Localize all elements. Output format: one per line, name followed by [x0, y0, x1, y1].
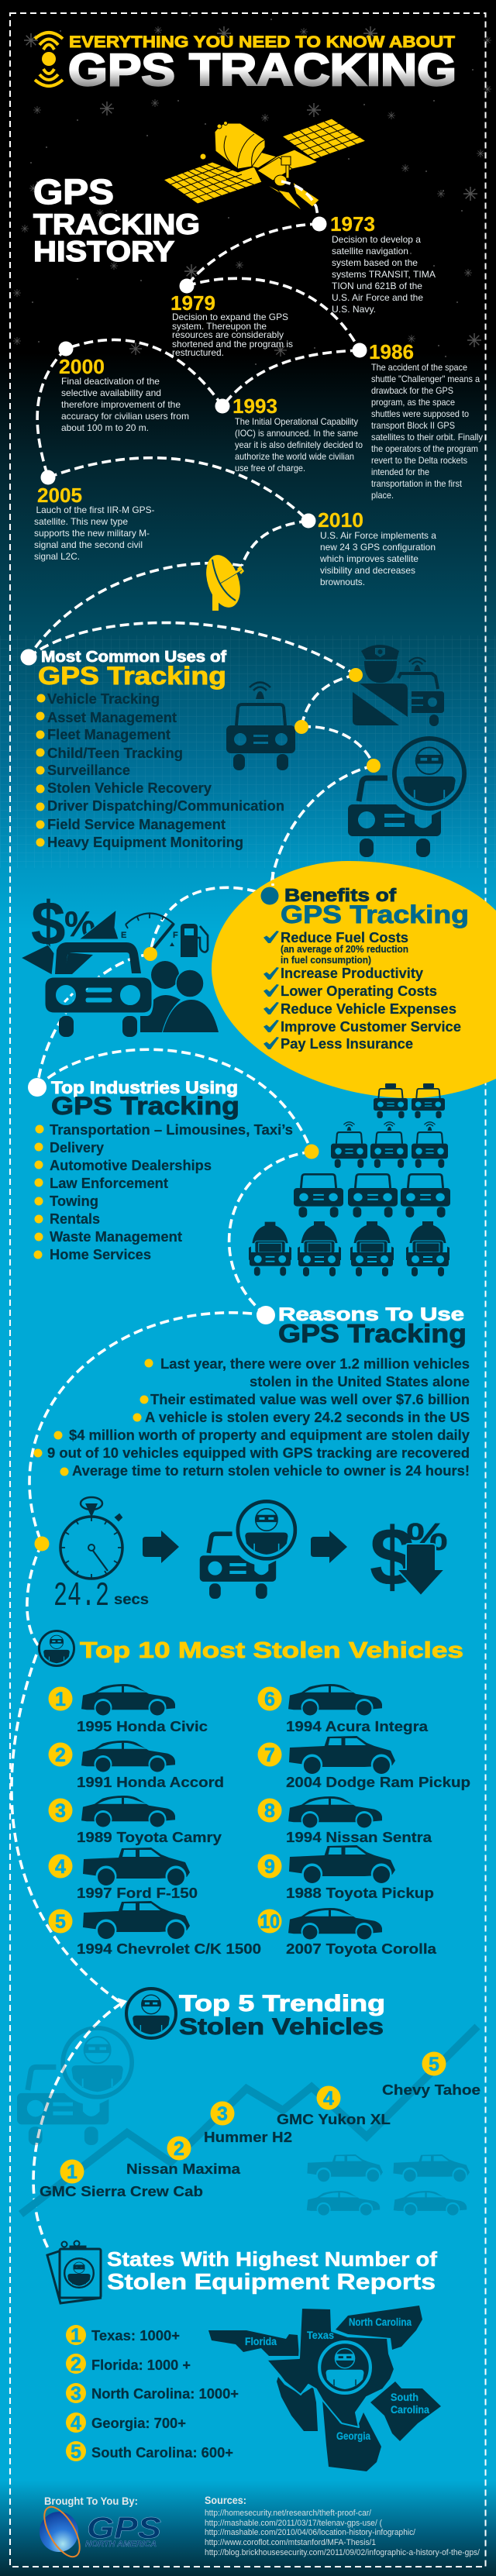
timeline: 1993: use free of charge.: [235, 463, 305, 474]
arrow: [143, 1531, 179, 1563]
trending 1: [40, 2159, 203, 2199]
panel: top industries: GPS Tracking: [51, 1092, 239, 1120]
stopwatch time: 24.2: [53, 1577, 109, 1616]
state 4: [66, 2412, 186, 2434]
timeline: 2005: 2005: [37, 484, 82, 507]
faded vehicles: [307, 2154, 470, 2216]
panel: top 5 trending stolen vehicles: [17, 1989, 480, 2216]
vehicle 8: 8: [264, 1800, 275, 1822]
state 3: North Carolina: 1000+: [91, 2386, 239, 2402]
trending 5: Chevy Tahoe: [382, 2082, 480, 2098]
timeline: 1993: year it is also definitely decided to: [235, 439, 363, 450]
vehicle 2: 1991 Honda Accord: [77, 1775, 224, 1790]
timeline: 1986: The accident of the space: [371, 362, 467, 373]
timeline: 2005: satellite. This new type: [34, 516, 128, 527]
trending 5: [382, 2052, 480, 2098]
industries list: Rentals: [50, 1211, 100, 1227]
heading: Top 10 Most Stolen Vehicles: [80, 1638, 463, 1663]
footer: sources: http://mashable.com/2011/03/17/telenav-gps-use/ (: [205, 2519, 382, 2528]
timeline: 1986: shuttle "Challenger" means a: [371, 374, 480, 384]
vehicle 5: [48, 1901, 261, 1957]
timeline: 1986: 1986: [369, 340, 414, 363]
fuel gauge: E: [121, 931, 126, 940]
benefits list: Improve Customer Service: [281, 1019, 461, 1035]
heading: gps tracking history: [33, 172, 200, 267]
state 2: [66, 2354, 191, 2375]
reasons list: $4 million worth of property and equipment are stolen daily: [69, 1427, 470, 1443]
footer: sources: [205, 2494, 480, 2557]
state 1: Texas: 1000+: [91, 2328, 180, 2344]
timeline: 1979: resources are considerably: [172, 329, 284, 340]
trending 4: 4: [323, 2088, 334, 2109]
timeline: 2010: which improves satellite: [319, 553, 418, 564]
timeline: 2000: [59, 341, 189, 433]
vehicle 3: 1989 Toyota Camry: [77, 1830, 222, 1845]
map labels: Florida: [245, 2335, 277, 2347]
map labels: North Carolina: [349, 2316, 412, 2328]
panel: benefits: [212, 861, 496, 1098]
map labels: Carolina: [391, 2403, 429, 2416]
timeline: 2000: about 100 m to 20 m.: [61, 422, 149, 433]
heading: States With Highest Number of: [107, 2247, 437, 2271]
vehicle 10: 10: [260, 1911, 280, 1933]
timeline: 1973: system based on the: [332, 257, 418, 268]
trending 2: Nissan Maxima: [126, 2161, 241, 2177]
windshield dash in headlight: [64, 994, 73, 1002]
vehicle 4: 4: [55, 1856, 66, 1878]
timeline: 1993: 1993: [232, 394, 277, 418]
timeline: 1986: drawback for the GPS: [371, 385, 453, 396]
faded trend line: [21, 2027, 477, 2214]
timeline: 1973: TION und 621B of the: [332, 281, 422, 291]
timeline: 1993: (IOC) is announced. In the same: [235, 428, 358, 439]
marker dot: [257, 1306, 275, 1324]
timeline: 2000: Final deactivation of the: [61, 376, 160, 387]
title line one: EVERYTHING YOU NEED TO KNOW ABOUT: [69, 33, 455, 51]
timeline: 1986: revert to the Delta rockets: [371, 455, 467, 466]
timeline: 1986: [352, 340, 483, 501]
timeline: 1993: [215, 394, 363, 474]
map labels: [245, 2316, 429, 2442]
yellow blob: [212, 861, 496, 1098]
fuel gauge: [121, 913, 178, 949]
benefits list: [264, 930, 461, 1052]
icon: thief and car: [348, 739, 464, 857]
uses list: Child/Teen Tracking: [47, 746, 183, 761]
trending 5: 5: [429, 2054, 439, 2075]
reasons list: A vehicle is stolen every 24.2 seconds in the US: [145, 1410, 470, 1425]
timeline: 1973: Decision to develop a: [332, 234, 421, 245]
vehicle 1: 1: [55, 1689, 66, 1710]
vehicle 6: 1994 Acura Integra: [286, 1719, 429, 1734]
vehicle 3: 3: [55, 1800, 66, 1822]
timeline: 2010: 2010: [318, 508, 363, 532]
state 3: [66, 2383, 239, 2405]
marker dot: [28, 1078, 46, 1097]
heading: gps tracking history: TRACKING: [33, 208, 200, 240]
footer: sources: Sources:: [205, 2494, 246, 2506]
uses list: Driver Dispatching/Communication: [47, 798, 284, 814]
map labels: Georgia: [336, 2430, 370, 2442]
vehicle 6: [257, 1684, 429, 1734]
icon: falling value: $: [370, 1511, 415, 1603]
industries list: Waste Management: [50, 1229, 182, 1245]
vehicle 9: 9: [264, 1856, 275, 1878]
timeline: 2005: signal L2C.: [34, 551, 80, 562]
industries list: Automotive Dealerships: [50, 1158, 212, 1173]
timeline: 1973: U.S. Navy.: [332, 304, 376, 315]
state 2: Florida: 1000 +: [91, 2357, 191, 2373]
trending 2: [126, 2136, 241, 2177]
trending 1: GMC Sierra Crew Cab: [40, 2184, 203, 2199]
panel: most common uses: [20, 649, 284, 850]
map: thief: [319, 2342, 370, 2393]
timeline: 1979: Decision to expand the GPS: [172, 312, 288, 322]
vehicle 9: 1988 Toyota Pickup: [286, 1886, 434, 1901]
vehicle 7: [257, 1736, 470, 1790]
icon: fleet of vehicles: [249, 1083, 450, 1276]
benefits list: Pay Less Insurance: [281, 1036, 413, 1052]
timeline: 2010: new 24 3 GPS configuration: [320, 542, 436, 553]
dash over blob: [271, 872, 274, 886]
timeline: 1986: intended for the: [371, 467, 429, 477]
timeline: 1979: 1979: [170, 291, 215, 315]
fuel pump: [181, 924, 198, 957]
uses list: Heavy Equipment Monitoring: [47, 835, 243, 850]
timeline: 1973: satellite navigation: [332, 246, 408, 257]
faded thief car: [17, 2028, 132, 2145]
uses list: [36, 691, 284, 850]
vehicle 7: 2004 Dodge Ram Pickup: [286, 1775, 470, 1790]
vehicle 4: [48, 1848, 198, 1901]
reasons list: Their estimated value was well over $7.6 billion: [150, 1392, 470, 1407]
icon: police officer and car: [353, 645, 444, 726]
timeline: 2000: therefore improvement of the: [61, 399, 181, 410]
panel: reasons to use: GPS Tracking: [278, 1319, 467, 1348]
trending 2: 2: [174, 2138, 184, 2160]
timeline: 1979: restructured.: [172, 347, 224, 358]
heading: gps tracking history: HISTORY: [33, 236, 174, 267]
vehicle 8: 1994 Nissan Sentra: [286, 1830, 432, 1845]
state 2: 2: [71, 2354, 81, 2375]
dashed timeline path: [12, 224, 374, 2250]
vehicle 4: 1997 Ford F-150: [77, 1886, 198, 1901]
heading: Reasons To Use: [278, 1304, 464, 1325]
panel: top 5 trending stolen vehicles: Stolen Vehicles: [179, 2014, 384, 2040]
heading: Top Industries Using: [51, 1078, 238, 1097]
timeline markers: [294, 668, 381, 773]
trending 4: GMC Yukon XL: [277, 2112, 391, 2127]
timeline: 1986: place.: [371, 490, 394, 501]
icon: cost cluster with car, fuel gauge and people: [21, 889, 219, 1037]
uses list: Surveillance: [47, 763, 130, 778]
vehicle 2: [48, 1741, 224, 1790]
icon: thief and car: [200, 1501, 295, 1599]
timeline: 2000: selective availability and: [61, 387, 161, 398]
timeline: 1986: transportation in the first: [371, 478, 463, 489]
marker dot: [260, 887, 279, 905]
icon: falling value: %: [406, 1515, 448, 1558]
footer: sources: http://homesecurity.net/research/theft-proof-car/: [205, 2509, 372, 2518]
panel: top industries: [28, 1078, 450, 1276]
timeline: 1973: systems TRANSIT, TIMA: [332, 269, 436, 280]
trending 4: [277, 2086, 391, 2127]
timeline: 2010: U.S. Air Force implements a: [320, 530, 436, 541]
heading: gps tracking history: GPS: [33, 172, 114, 212]
timeline: 1979: [170, 279, 293, 358]
header title: [35, 33, 456, 95]
benefits list: Lower Operating Costs: [281, 983, 437, 999]
timeline: 2005: Lauch of the first IIR-M GPS-: [36, 505, 155, 515]
state 5: 5: [71, 2441, 81, 2463]
state 1: 1: [71, 2325, 81, 2347]
timeline: 2010: [301, 508, 436, 587]
benefits list: in fuel consumption): [281, 954, 371, 966]
timeline: 1986: program, as the space: [371, 397, 455, 408]
footer: sources: http://mashable.com/2010/04/06/location-history-infographic/: [205, 2528, 416, 2537]
footer: brought to you by: [37, 2495, 161, 2562]
reasons list: Last year, there were over 1.2 million vehicles: [160, 1356, 470, 1372]
trending 1: 1: [67, 2161, 78, 2183]
icon: satellite dish: [200, 551, 246, 611]
vehicle 5: 5: [55, 1911, 66, 1933]
industries list: Law Enforcement: [50, 1176, 168, 1191]
timeline: 1979: system. Thereupon the: [172, 321, 267, 332]
icon: satellite: [164, 119, 366, 211]
timeline: 2005: signal and the second civil: [34, 539, 143, 550]
map labels: Texas: [307, 2329, 334, 2341]
icon: thief: [39, 1631, 74, 1666]
benefits list: Reduce Fuel Costs: [281, 930, 408, 945]
icon: cost cluster with car, fuel gauge and people: %: [64, 904, 95, 944]
panel: benefits: GPS Tracking: [281, 901, 469, 928]
reasons list: [34, 1356, 470, 1479]
state 4: Georgia: 700+: [91, 2416, 186, 2431]
benefits list: Increase Productivity: [281, 966, 423, 981]
timeline: 1973: U.S. Air Force and the: [332, 292, 423, 303]
panel: states with highest stolen equipment reports: Stolen Equipment Reports: [107, 2270, 436, 2295]
vehicle 6: 6: [264, 1689, 275, 1710]
logo: gps north america: GPS: [87, 2512, 161, 2545]
industries list: Home Services: [50, 1247, 151, 1262]
timeline: 2000: accuracy for civilian users from: [61, 411, 189, 422]
timeline marker: [143, 947, 157, 961]
timeline: 1986: transport Block II GPS: [371, 420, 455, 431]
timeline: 1979: shortened and the program is: [172, 339, 293, 350]
timeline: 2005: supports the new military M-: [34, 528, 150, 539]
industries list: Towing: [50, 1193, 98, 1209]
vehicle 7: 7: [264, 1744, 275, 1766]
vehicle 8: [257, 1796, 432, 1845]
reasons list: 9 out of 10 vehicles equipped with GPS tracking are recovered: [47, 1445, 470, 1461]
icon: clipboard: [47, 2241, 102, 2303]
industries list: [34, 1122, 293, 1262]
benefits list: (an average of 20% reduction: [281, 943, 408, 955]
vehicle 10: 2007 Toyota Corolla: [286, 1941, 437, 1957]
uses list: Stolen Vehicle Recovery: [47, 780, 212, 796]
vehicle 9: [257, 1845, 434, 1901]
state 4: 4: [71, 2412, 81, 2434]
panel: states with highest stolen equipment reports: [47, 2241, 441, 2471]
car: [45, 942, 152, 1037]
vehicle 10: [257, 1908, 437, 1957]
timeline: 2010: visibility and decreases: [320, 565, 415, 576]
state 3: 3: [71, 2383, 81, 2405]
heading: Benefits of: [284, 885, 396, 905]
icon: falling value: [370, 1511, 448, 1603]
timeline: 2000: 2000: [59, 355, 105, 378]
timeline marker: [34, 1536, 50, 1551]
logo: gps north america: NORTH AMERICA: [85, 2540, 157, 2549]
state 5: South Carolina: 600+: [91, 2445, 233, 2461]
benefits list: Reduce Vehicle Expenses: [281, 1001, 456, 1017]
vehicle 1: 1995 Honda Civic: [77, 1719, 208, 1734]
timeline: 1973: 1973: [330, 212, 375, 236]
uses list: Field Service Management: [47, 817, 226, 832]
people: [151, 961, 179, 989]
icon: tracked car: [226, 682, 295, 770]
industries list: Delivery: [50, 1140, 104, 1155]
panel: reasons to use: [34, 1304, 470, 1616]
icon: stopwatch: [60, 1497, 122, 1579]
vehicle 5: 1994 Chevrolet C/K 1500: [77, 1941, 261, 1957]
vehicle 2: 2: [55, 1744, 66, 1766]
logo: gps north america: [37, 2502, 161, 2562]
icon: cost cluster with car, fuel gauge and people: $: [31, 889, 65, 958]
reasons list: Average time to return stolen vehicle to owner is 24 hours!: [72, 1463, 470, 1479]
state 5: [66, 2441, 233, 2463]
map: states: [208, 2306, 441, 2471]
arrow: [311, 1531, 347, 1563]
timeline: 1993: authorize the world wide civilian: [235, 451, 354, 462]
icon: thief: [126, 1989, 176, 2038]
uses list: Vehicle Tracking: [47, 691, 160, 707]
timeline: 1986: satellites to their orbit. Finally: [371, 432, 483, 443]
timeline: 2010: brownouts.: [320, 577, 365, 587]
trending 3: Hummer H2: [204, 2130, 292, 2145]
state 1: [66, 2325, 180, 2347]
title line two: GPS TRACKING: [68, 45, 456, 95]
timeline: 1986: shuttles were supposed to: [371, 408, 469, 419]
timeline marker: [304, 1144, 319, 1159]
timeline: 1986: the operators of the program: [371, 443, 478, 454]
footer: sources: http://www.coroflot.com/mtstanford/MFA-Thesis/1: [205, 2538, 376, 2547]
uses list: Fleet Management: [47, 727, 170, 742]
arrow tip: [118, 1998, 127, 2009]
icon: gps signal: [35, 33, 63, 86]
panel: most common uses: GPS Tracking: [38, 662, 226, 690]
timeline: 1973: [312, 212, 436, 315]
timeline: 2005: [34, 470, 155, 562]
panel: top 10 most stolen vehicles: [39, 1631, 470, 1957]
reasons list: stolen in the United States alone: [250, 1374, 470, 1390]
footer: sources: http://blog.brickhousesecurity.com/2011/09/02/infographic-a-history-of-the-gps/: [205, 2548, 480, 2557]
marker dot: [20, 649, 37, 665]
trending 3: 3: [217, 2103, 228, 2125]
heading: Top 5 Trending: [179, 1991, 385, 2016]
map labels: South: [391, 2391, 418, 2403]
industries list: Transportation – Limousines, Taxi’s: [50, 1122, 293, 1138]
heading: Most Common Uses of: [41, 649, 226, 666]
footer: brought to you by: Brought To You By:: [44, 2495, 138, 2507]
uses list: Asset Management: [47, 710, 177, 725]
secs label: secs: [114, 1592, 149, 1608]
vehicle 1: [48, 1684, 208, 1734]
fuel gauge: F: [173, 931, 178, 940]
timeline: 1993: The Initial Operational Capability: [235, 416, 358, 427]
vehicle 3: [48, 1796, 222, 1845]
satellite beam: [281, 181, 319, 224]
trending 3: [204, 2102, 292, 2145]
